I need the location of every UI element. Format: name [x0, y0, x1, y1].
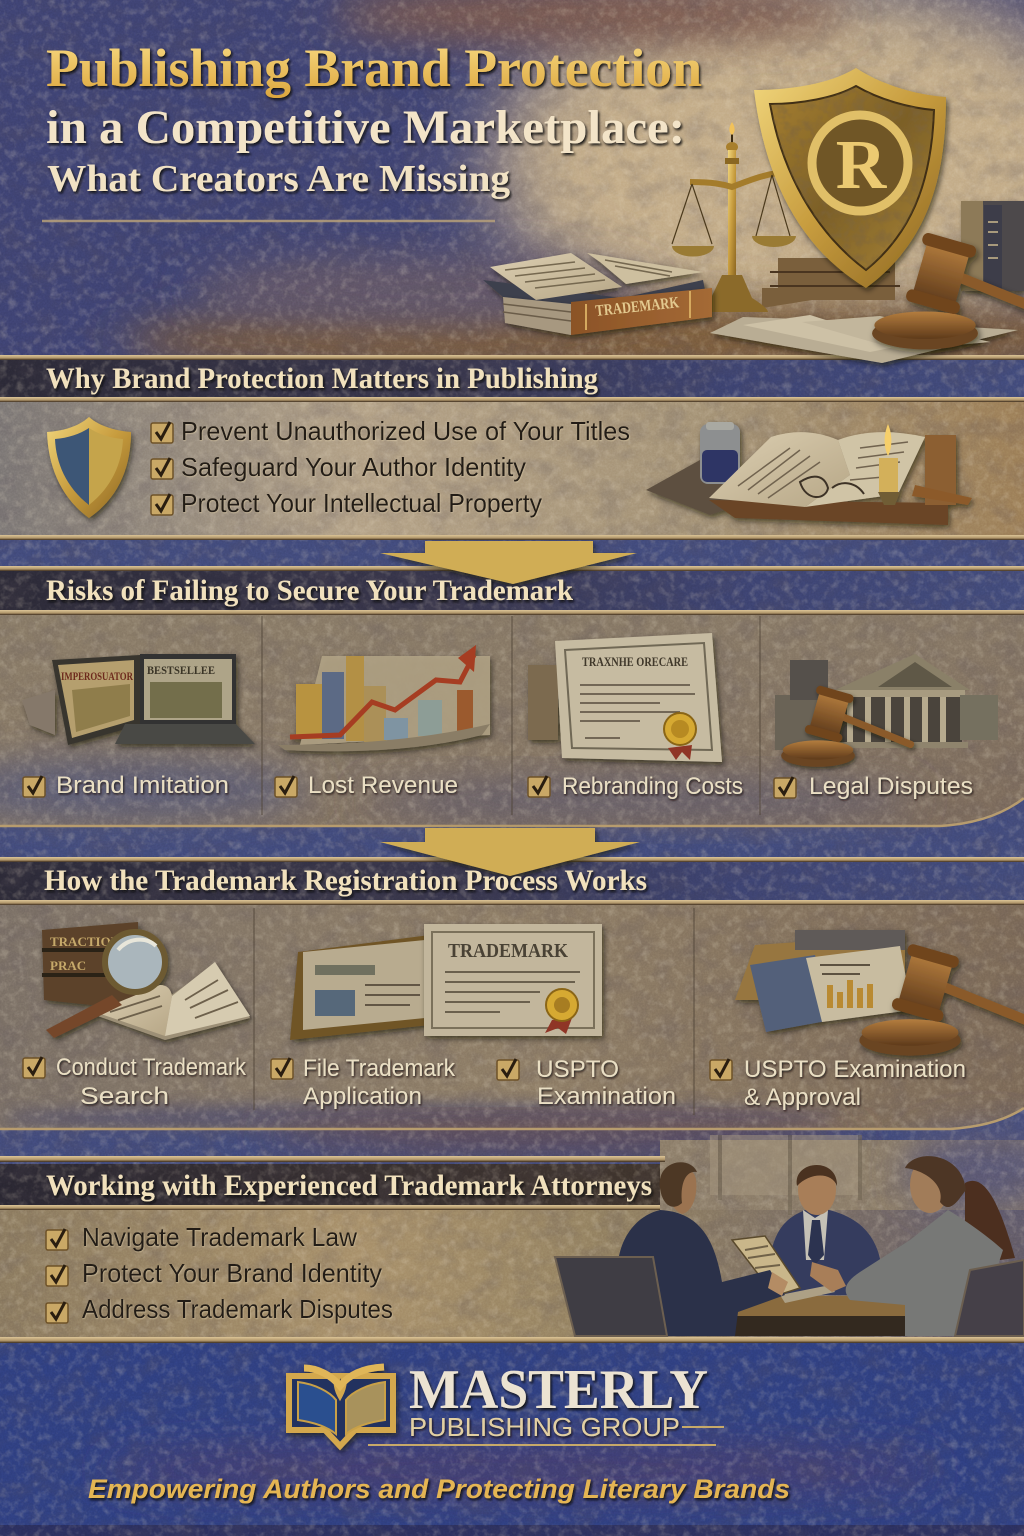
icon: gavel [872, 232, 1024, 349]
item: protect intellectual property: Protect Your Intellectual Property [181, 488, 542, 518]
icon: screens and laptop [22, 654, 255, 745]
icon: reference books [961, 201, 1024, 291]
icon: book, ink and candle [646, 422, 972, 525]
right attorney [810, 1156, 1003, 1336]
label: conduct trademark search: Conduct Trademark [56, 1054, 247, 1081]
icon: shield with registered mark [750, 65, 950, 290]
step: conduct search [23, 922, 250, 1110]
risk: legal disputes [774, 654, 998, 800]
icon: trademark certificate [424, 924, 602, 1036]
label: examination and approval: USPTO Examination [744, 1056, 966, 1083]
icon: books and magnifying glass [42, 922, 250, 1040]
checklist [151, 416, 630, 518]
heading: working with attorneys: Working with Experienced Trademark Attorneys [46, 1169, 652, 1202]
item: protect brand identity: Protect Your Brand Identity [82, 1258, 382, 1288]
icon: courthouse [775, 654, 998, 750]
item: navigate trademark law: Navigate Trademark Law [82, 1222, 357, 1252]
item: prevent unauthorized use: Prevent Unauthorized Use of Your Titles [181, 416, 630, 446]
step: file application [271, 935, 456, 1110]
arrow [380, 541, 637, 584]
title line 2: in a Competitive Marketplace: [46, 101, 685, 154]
panel: attorney meeting illustration [555, 1135, 1024, 1336]
risk: lost revenue [275, 645, 490, 799]
label: file application [271, 1055, 456, 1110]
panel: why brand protection matters [47, 416, 972, 525]
heading: how registration works: How the Trademark Registration Process Works [44, 864, 647, 897]
checklist: attorneys [46, 1222, 393, 1324]
label: legal disputes: Legal Disputes [809, 773, 973, 800]
icon: books and magnifying glass: TRACTION [50, 934, 121, 949]
icon: screens and laptop: IMPEROSUATOR [61, 669, 133, 683]
icon: large gavel [859, 943, 1024, 1056]
tagline: Empowering Authors and Protecting Literary Brands [88, 1474, 790, 1504]
item: address disputes: Address Trademark Disputes [82, 1294, 393, 1324]
step: USPTO examination [424, 924, 676, 1110]
label: rebranding costs: Rebranding Costs [562, 773, 743, 800]
icon: application folder [290, 935, 430, 1040]
label: file application: File Trademark [303, 1055, 456, 1082]
section bands [0, 360, 1024, 1206]
center attorney [768, 1165, 882, 1295]
panel: risks [22, 633, 998, 800]
icon: stacked books [762, 258, 900, 308]
icon: books and magnifying glass: PRAC [50, 958, 86, 973]
icon: small gavel [781, 685, 915, 767]
right chair [955, 1260, 1024, 1336]
icon: documents [735, 930, 912, 1032]
icon: scales of justice [672, 122, 796, 312]
title line 1: Publishing Brand Protection [46, 38, 702, 98]
heading: why brand protection matters: Why Brand Protection Matters in Publishing [46, 362, 598, 395]
label: conduct trademark search [23, 1054, 247, 1110]
logo [289, 1359, 724, 1446]
table with tablet [712, 1236, 912, 1336]
risk: brand imitation [22, 654, 255, 799]
icon: certificate: TRAXNHE ORECARE [582, 654, 688, 669]
step: examination and approval [710, 930, 1024, 1111]
label: brand imitation: Brand Imitation [56, 772, 229, 799]
icon: open book [483, 253, 705, 310]
label: USPTO examination: Examination [537, 1083, 676, 1110]
icon: screens and laptop: BESTSELLEE [147, 663, 215, 677]
title [46, 38, 702, 200]
label: examination and approval: & Approval [744, 1084, 861, 1111]
heading: risks: Risks of Failing to Secure Your Trademark [46, 574, 573, 607]
wordmark: MASTERLY [409, 1359, 708, 1421]
label: USPTO examination [497, 1056, 676, 1110]
icon: trademark book [503, 288, 712, 335]
label: lost revenue: Lost Revenue [308, 772, 458, 799]
label: examination and approval [710, 1056, 966, 1111]
title line 3: What Creators Are Missing [47, 158, 510, 200]
label: file application: Application [303, 1083, 422, 1110]
icon: bar chart with arrow [278, 645, 490, 751]
left chair [555, 1257, 667, 1336]
icon: open book logo [289, 1367, 393, 1446]
panel: registration process [23, 922, 1024, 1111]
background window [710, 1135, 860, 1215]
icon: split shield [47, 417, 131, 518]
publishing group: PUBLISHING GROUP [409, 1412, 680, 1442]
label: USPTO examination: USPTO [536, 1056, 619, 1083]
left attorney [612, 1162, 788, 1336]
icon: trademark book: TRADEMARK [595, 294, 680, 320]
risk: rebranding costs [528, 633, 743, 800]
woman behind [965, 1181, 1015, 1262]
icon: certificate [528, 633, 722, 762]
icon: trademark certificate: TRADEMARK [448, 940, 568, 962]
item: safeguard author identity: Safeguard Your Author Identity [181, 452, 526, 482]
icon: papers [710, 315, 1018, 363]
hero illustration [483, 65, 1024, 363]
label: conduct trademark search: Search [80, 1083, 169, 1110]
icon: shield with registered mark: R [836, 127, 888, 204]
arrow [380, 828, 640, 876]
